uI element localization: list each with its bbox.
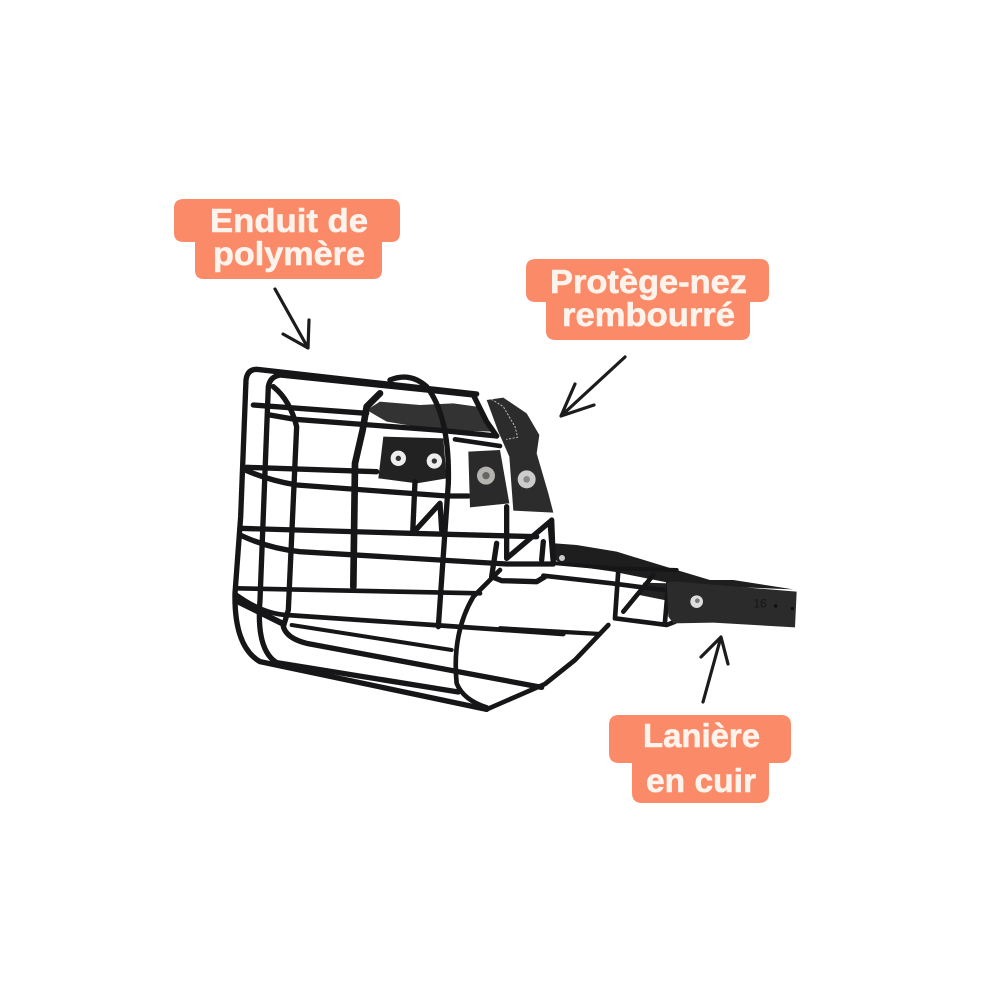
muzzle illustration — [235, 369, 797, 709]
strap and leather parts behind the cage — [367, 402, 793, 601]
label: Lanière en cuir: en cuir — [646, 762, 756, 799]
label: Lanière en cuir — [609, 715, 791, 803]
label: Protège-nez rembourré — [526, 259, 769, 340]
label: Protège-nez rembourré: Protège-nez — [550, 263, 747, 300]
strap and leather parts over the cage — [468, 398, 797, 627]
label: Enduit de polymère — [174, 199, 400, 279]
stitching — [492, 399, 518, 439]
arrow: to leather strap — [701, 637, 728, 702]
rivets — [391, 451, 703, 608]
label: Lanière en cuir: Lanière — [643, 717, 760, 754]
label: Enduit de polymère: polymère — [213, 235, 365, 272]
arrow: to padded nose guard — [561, 357, 625, 416]
strap marking: 16 — [753, 596, 767, 610]
label: Protège-nez rembourré: rembourré — [562, 296, 735, 333]
label: Enduit de polymère: Enduit de — [210, 202, 368, 239]
wire cage — [235, 369, 677, 709]
arrow: to polymer coating — [275, 289, 309, 348]
